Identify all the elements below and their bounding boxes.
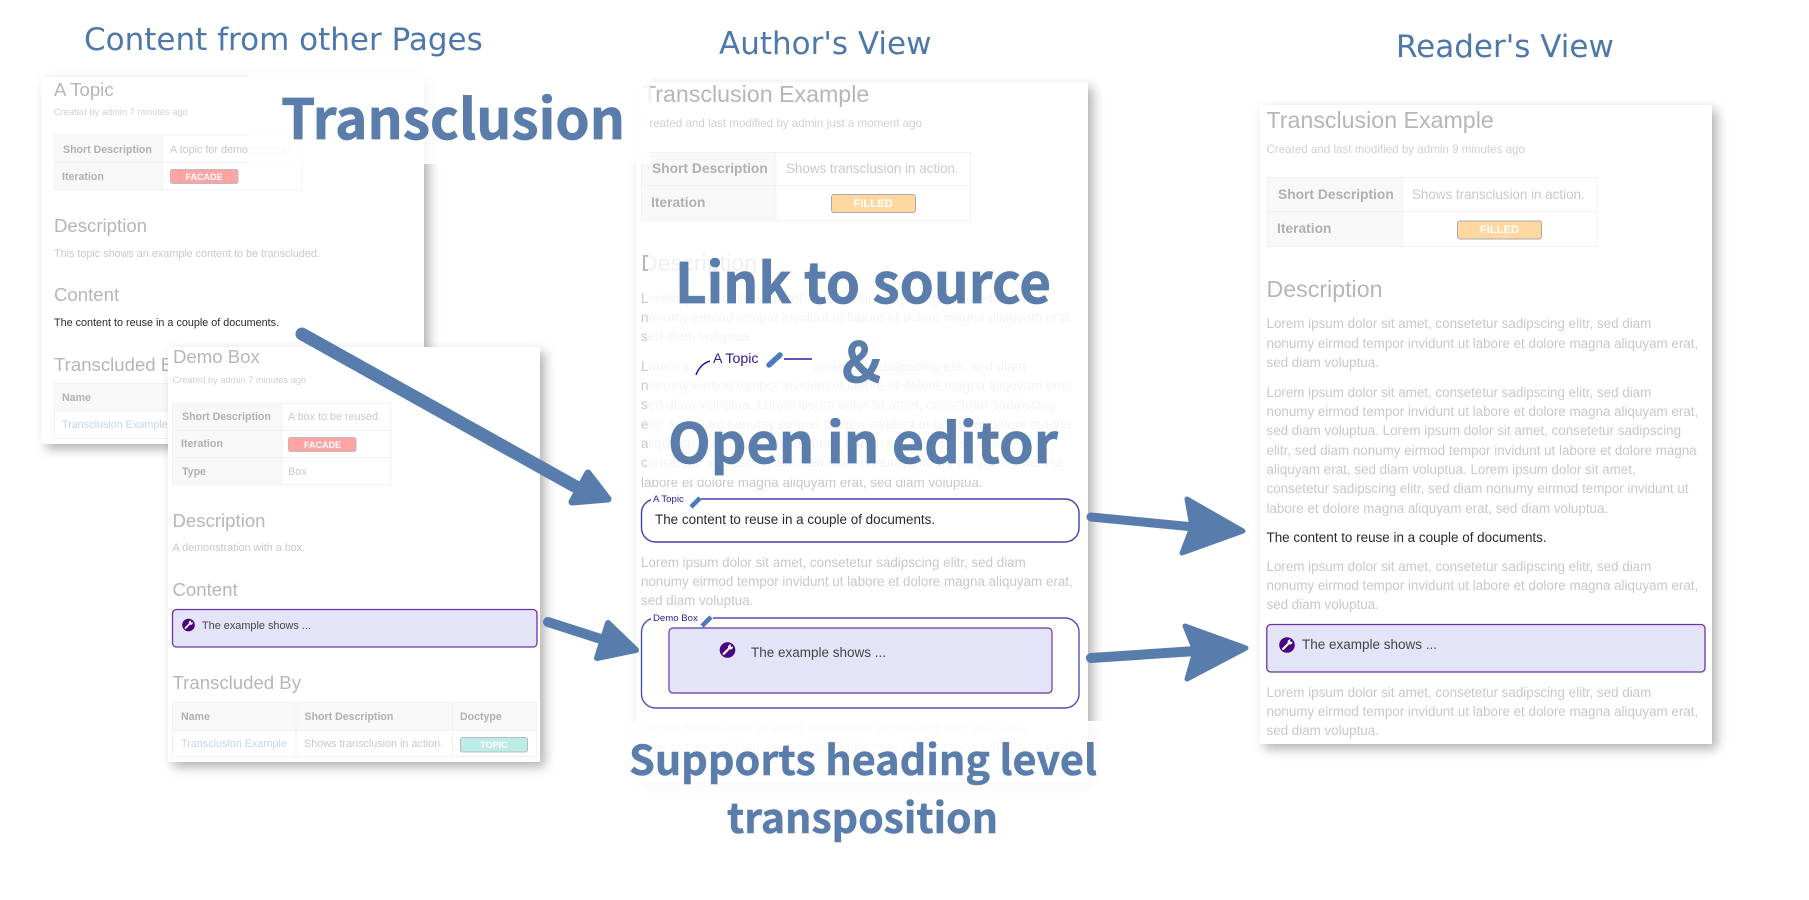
- metadata table: reader: FILLED: [1480, 224, 1519, 236]
- metadata table: reader: Iteration: [1277, 221, 1331, 236]
- panel: Demo Box page: Description: [172, 510, 266, 531]
- transcluded text: reader: The content to reuse in a couple of documents.: [1266, 530, 1547, 545]
- panel: Demo Box page: A demonstration with a box.: [172, 542, 305, 554]
- metadata table: reader: Shows transclusion in action.: [1412, 187, 1585, 202]
- transcluded-by table: Demo Box: Transclusion Example: [181, 738, 287, 750]
- metadata table: author: Iteration: [651, 195, 705, 210]
- callout: example box: The example shows ...: [1302, 637, 1437, 652]
- panel: Author's view page: Transclusion Example: [642, 81, 869, 107]
- metadata table: author: [641, 152, 970, 221]
- transclusion frame: Demo Box: The example shows ...: [751, 645, 886, 660]
- transcluded-by table: A Topic: [54, 383, 184, 438]
- text block: lorem paragraph 3: nonumy eirmod tempor invidunt ut labore et dolore magna aliquyam erat,: [1266, 578, 1698, 593]
- panel: A Topic page: This topic shows an example content to be transcluded.: [54, 248, 320, 260]
- feature label: Supports heading level: Supports heading level: [629, 727, 1097, 787]
- icon: wrench badge: [720, 642, 735, 658]
- text block: lorem paragraph 1: [641, 291, 1073, 344]
- arrow: A Topic frame to reader's view: [1091, 499, 1243, 553]
- text block: lorem paragraph 3: sed diam voluptua.: [641, 593, 753, 608]
- metadata table: Demo Box: Box: [288, 466, 307, 478]
- text block: lorem paragraph 2: aliquyam erat, sed diam voluptua. Lorem ipsum dolor sit amet,: [641, 436, 1010, 451]
- text block: lorem paragraph 2: aliquyam erat, sed diam voluptua. Lorem ipsum dolor sit amet,: [1266, 462, 1636, 477]
- metadata table: Demo Box: FACADE: [304, 440, 341, 450]
- panel: Demo Box page: Content: [172, 579, 238, 600]
- text block: lorem paragraph 3: nonumy eirmod tempor invidunt ut labore et dolore magna aliquyam erat,: [641, 574, 1073, 589]
- feature label: ampersand: &: [842, 318, 881, 398]
- panel: Demo Box page: Created by admin 7 minutes ago: [172, 375, 306, 385]
- callout: example box: The example shows ...: [202, 620, 311, 632]
- transcluded-by table: Demo Box: [172, 702, 537, 757]
- metadata table: reader: [1266, 177, 1597, 247]
- panel: Reader's view page: Transclusion Example: [1266, 107, 1494, 133]
- text block: lorem paragraph 3: [641, 555, 1073, 608]
- heading: content from other pages: Content from other Pages: [84, 22, 483, 58]
- transcluded-by table: A Topic: Name: [62, 392, 91, 404]
- metadata table: reader: Short Description: [1278, 187, 1394, 202]
- text block: lorem paragraph 2: Lorem ipsum dolor sit amet, consetetur sadipscing elitr, sed diam: [641, 359, 1026, 374]
- panel: A Topic page: Description: [54, 215, 147, 236]
- white veil behind Transclusion title: [248, 72, 650, 164]
- transclusion frame: Demo Box: Demo Box: [653, 613, 698, 624]
- metadata table: Demo Box: Short Description: [182, 411, 271, 423]
- white veil behind heading-level text: [630, 721, 1110, 806]
- text block: lorem paragraph 3: sed diam voluptua.: [1266, 597, 1379, 612]
- panel: Demo Box page: Transcluded By: [172, 672, 302, 693]
- panel: A Topic page: [41, 77, 424, 444]
- floating edit label: A Topic: A Topic: [713, 351, 758, 367]
- text block: lorem paragraph 3: Lorem ipsum dolor sit amet, consetetur sadipscing elitr, sed diam: [641, 555, 1026, 570]
- feature label: transposition: transposition: [727, 785, 998, 845]
- text block: lorem paragraph 2: [641, 359, 1073, 490]
- metadata table: A Topic: [54, 135, 302, 190]
- arrow: A Topic content to author's view: [302, 334, 608, 502]
- text block: lorem paragraph 2: [1266, 385, 1698, 516]
- panel: Demo Box page: Demo Box: [173, 346, 261, 367]
- text block: lorem paragraph 2: labore et dolore magna aliquyam erat, sed diam voluptua.: [641, 475, 983, 490]
- icon: wrench badge: [1279, 637, 1295, 653]
- text block: lorem paragraph 1: [1266, 316, 1698, 370]
- heading: author's view: Author's View: [719, 26, 931, 62]
- metadata table: Demo Box: Type: [182, 466, 206, 478]
- transcluded-by table: Demo Box: Shows transclusion in action.: [304, 738, 443, 750]
- transcluded-by table: Demo Box: Name: [181, 711, 210, 723]
- text block: lorem paragraph 4: Lorem ipsum dolor sit amet, consetetur sadipscing elitr, sed diam: [1266, 685, 1651, 700]
- panel: Reader's view page: Description: [1266, 276, 1382, 302]
- transcluded-by table: Demo Box: Short Description: [304, 711, 393, 723]
- transcluded-by table: A Topic: Transclusion Example: [62, 419, 168, 431]
- metadata table: author: Short Description: [652, 161, 768, 176]
- transclusion frame: A Topic: A Topic: [653, 494, 684, 505]
- text block: lorem paragraph 3: Lorem ipsum dolor sit amet, consetetur sadipscing elitr, sed diam: [1266, 559, 1651, 574]
- panel: A Topic page: The content to reuse in a couple of documents.: [54, 317, 279, 329]
- text block: lorem paragraph 2: elitr, sed diam nonumy eirmod tempor invidunt ut labore et dolore magna: [1266, 443, 1697, 458]
- text block: lorem paragraph 2: labore et dolore magna aliquyam erat, sed diam voluptua.: [1266, 501, 1608, 516]
- text block: lorem paragraph 1: sed diam voluptua.: [1266, 355, 1379, 370]
- text block: lorem paragraph 1: Lorem ipsum dolor sit amet, consetetur sadipscing elitr, sed diam: [1266, 316, 1651, 331]
- text block: lorem paragraph 2: nonumy eirmod tempor invidunt ut labore et dolore magna aliquyam erat,: [1266, 404, 1698, 419]
- metadata table: Demo Box: [172, 403, 391, 485]
- text block: lorem paragraph 4: sed diam voluptua.: [1266, 723, 1379, 738]
- floating edit label: A Topic: [693, 351, 813, 377]
- metadata table: A Topic: A topic for demonstration.: [170, 144, 292, 156]
- text block: lorem paragraph 1: sed diam voluptua.: [641, 329, 753, 344]
- metadata table: A Topic: Short Description: [63, 144, 152, 156]
- text block: lorem paragraph 4: nonumy eirmod tempor invidunt ut labore et dolore magna aliquyam erat,: [1266, 704, 1698, 719]
- metadata table: A Topic: FACADE: [185, 172, 223, 182]
- panel: Demo Box page: [168, 346, 540, 762]
- panel: Reader's view page: Created and last modified by admin 9 minutes ago: [1266, 143, 1525, 156]
- callout: example box: [1267, 624, 1705, 672]
- feature label: Link to source: Link to source: [675, 239, 1051, 319]
- transcluded-by table: Demo Box: TOPIC: [480, 740, 508, 750]
- text block: lorem paragraph 4: [1266, 685, 1698, 738]
- heading: reader's view: Reader's View: [1396, 29, 1614, 65]
- white veil behind Link to source text: [648, 235, 1085, 480]
- text block: lorem paragraph 2: elitr, sed diam nonumy eirmod tempor invidunt ut labore et dolore magna: [641, 417, 1072, 432]
- arrow: Demo Box content to author's view: [548, 622, 636, 658]
- text block: lorem paragraph 1: Lorem ipsum dolor sit amet, consetetur sadipscing elitr, sed diam: [641, 291, 1026, 306]
- transcluded-by table: Demo Box: Doctype: [460, 711, 502, 723]
- text block: lorem paragraph 2: nonumy eirmod tempor invidunt ut labore et dolore magna aliquyam erat,: [641, 378, 1073, 393]
- text block: lorem paragraph 2: consetetur sadipscing elitr, sed diam nonumy eirmod tempor invidunt ut: [641, 455, 1063, 470]
- metadata table: Demo Box: Iteration: [181, 438, 223, 450]
- arrow: Demo Box frame to reader's view: [1091, 626, 1246, 679]
- text block: lorem paragraph 1: nonumy eirmod tempor invidunt ut labore et dolore magna aliquyam erat,: [1266, 336, 1698, 351]
- icon: pencil: [769, 355, 780, 365]
- transclusion frame: A Topic: [642, 494, 1079, 542]
- text block: lorem paragraph 2: Lorem ipsum dolor sit amet, consetetur sadipscing elitr, sed diam: [1266, 385, 1651, 400]
- title: Transclusion: Transclusion: [281, 75, 625, 155]
- panel: Reader's view page: [1260, 105, 1712, 744]
- panel: A Topic page: A Topic: [54, 79, 114, 100]
- panel: Author's view page: Created and last modified by admin just a moment ago: [641, 117, 922, 130]
- text block: lorem paragraph 4: [641, 720, 1073, 773]
- metadata table: author: FILLED: [853, 198, 893, 210]
- text block: lorem paragraph 3: [1266, 559, 1698, 612]
- panel: A Topic page: Transcluded By: [54, 354, 183, 375]
- text block: lorem paragraph 2: sed diam voluptua. Lorem ipsum dolor sit amet, consetetur sadipscing: [641, 397, 1056, 412]
- text block: lorem paragraph 1: nonumy eirmod tempor invidunt ut labore et dolore magna aliquyam erat,: [641, 310, 1073, 325]
- panel: Author's view page: [636, 81, 1088, 782]
- text block: lorem paragraph 2: sed diam voluptua. Lorem ipsum dolor sit amet, consetetur sadipscing: [1266, 423, 1681, 438]
- text block: lorem paragraph 4: sed diam voluptua.: [641, 758, 753, 773]
- panel: A Topic page: Created by admin 7 minutes ago: [54, 107, 188, 117]
- panel: A Topic page: Content: [54, 284, 120, 305]
- metadata table: A Topic: Iteration: [62, 171, 104, 183]
- text block: lorem paragraph 4: Lorem ipsum dolor sit amet, consetetur sadipscing elitr, sed diam: [641, 720, 1026, 735]
- callout: example box: [172, 610, 537, 647]
- text block: lorem paragraph 2: consetetur sadipscing elitr, sed diam nonumy eirmod tempor invidunt ut: [1266, 481, 1689, 496]
- panel: Author's view page: Description: [641, 250, 757, 276]
- text block: lorem paragraph 4: nonumy eirmod tempor invidunt ut labore et dolore magna aliquyam erat,: [641, 739, 1073, 754]
- metadata table: author: Shows transclusion in action.: [786, 161, 959, 176]
- icon: wrench badge: [182, 619, 195, 631]
- metadata table: Demo Box: A box to be reused.: [288, 411, 381, 423]
- transclusion frame: A Topic: The content to reuse in a couple of documents.: [655, 512, 935, 527]
- feature label: Open in editor: Open in editor: [668, 399, 1059, 479]
- transclusion frame: Demo Box: [642, 613, 1079, 708]
